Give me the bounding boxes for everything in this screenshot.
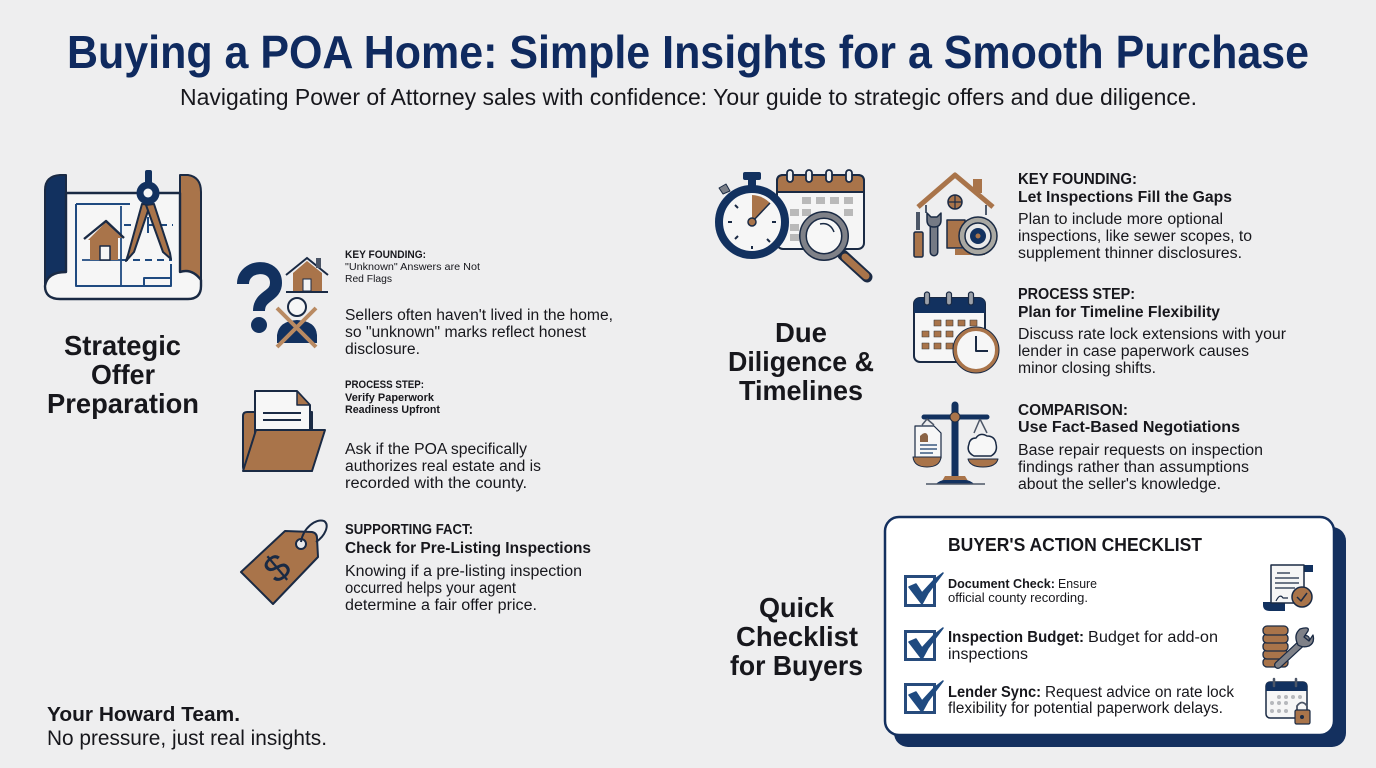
text: key founding unknown answers: disclosure. <box>345 341 420 358</box>
text: plan for timeline flexibility: Plan for Timeline Flexibility <box>1018 304 1220 321</box>
item: lender sync <box>948 684 1234 717</box>
text: plan for timeline flexibility <box>1018 286 1286 377</box>
icon: coins and wrench <box>1263 626 1314 667</box>
text: check for pre-listing inspections <box>345 522 591 614</box>
text: let inspections fill the gaps: KEY FOUNDING: <box>1018 171 1137 188</box>
heading: strategic offer preparation <box>47 330 199 419</box>
card <box>885 517 1334 735</box>
text: use fact-based negotiations <box>1018 402 1263 493</box>
heading: strategic offer preparation: Strategic <box>64 330 181 361</box>
text: use fact-based negotiations: about the seller's knowledge. <box>1018 476 1221 493</box>
item: document check: official county recording. <box>948 591 1088 605</box>
heading: quick checklist for buyers: Quick <box>759 592 834 623</box>
icon: blueprint with compass <box>45 170 201 299</box>
text: check for pre-listing inspections: Knowing if a pre-listing inspection <box>345 563 582 580</box>
text: let inspections fill the gaps: Let Inspections Fill the Gaps <box>1018 189 1232 206</box>
heading: due diligence and timelines: Timelines <box>739 375 863 406</box>
heading: strategic offer preparation: Preparation <box>47 388 199 419</box>
subtitle: Navigating Power of Attorney sales with confidence: Your guide to strategic offers and due diligence. <box>180 84 1197 110</box>
text: plan for timeline flexibility: lender in case paperwork causes <box>1018 343 1249 360</box>
text: use fact-based negotiations: findings rather than assumptions <box>1018 459 1249 476</box>
card shadow <box>894 527 1346 747</box>
text: verify paperwork readiness <box>345 379 541 492</box>
heading: quick checklist for buyers: for Buyers <box>730 650 863 681</box>
check: inspection budget <box>906 628 943 660</box>
item: lender sync: flexibility for potential paperwork delays. <box>948 700 1223 717</box>
text: verify paperwork readiness: Ask if the POA specifically <box>345 441 527 458</box>
footer: No pressure, just real insights. <box>47 727 327 750</box>
text: check for pre-listing inspections: determine a fair offer price. <box>345 597 537 614</box>
check: document check <box>906 573 943 606</box>
text: key founding unknown answers: Red Flags <box>345 273 392 285</box>
item: inspection budget: Budget for add-on <box>1088 629 1218 646</box>
text: check for pre-listing inspections: Check for Pre-Listing Inspections <box>345 540 591 557</box>
text: let inspections fill the gaps: supplement thinner disclosures. <box>1018 245 1242 262</box>
text: let inspections fill the gaps: inspections, like sewer scopes, to <box>1018 228 1252 245</box>
item: inspection budget <box>948 629 1218 663</box>
footer <box>47 703 327 750</box>
item: lender sync: Lender Sync: <box>948 684 1041 701</box>
heading: due diligence and timelines: Due <box>775 317 827 348</box>
text: verify paperwork readiness: PROCESS STEP: <box>345 379 424 391</box>
heading: strategic offer preparation: Offer <box>91 359 155 390</box>
text: verify paperwork readiness: recorded with the county. <box>345 475 527 492</box>
heading: due diligence and timelines: Diligence & <box>728 346 874 377</box>
item: document check: Ensure <box>1058 577 1097 591</box>
text: verify paperwork readiness: authorizes real estate and is <box>345 458 541 475</box>
icon: price tag: $ <box>256 546 299 592</box>
text: plan for timeline flexibility: PROCESS STEP: <box>1018 286 1135 303</box>
icon: calendar with padlock <box>1266 679 1310 724</box>
text: use fact-based negotiations: COMPARISON: <box>1018 402 1128 419</box>
text: check for pre-listing inspections: SUPPORTING FACT: <box>345 522 473 538</box>
item: document check: Document Check: <box>948 577 1055 591</box>
text: check for pre-listing inspections: occurred helps your agent <box>345 580 517 597</box>
text: key founding unknown answers <box>345 249 613 358</box>
icon: stopwatch, calendar and magnifier <box>719 170 867 277</box>
icon: price tag <box>241 520 327 604</box>
heading: quick checklist for buyers <box>730 592 863 681</box>
icon: calendar with clock <box>914 292 999 373</box>
icon: balance scale <box>913 405 998 484</box>
text: verify paperwork readiness: Verify Paperwork <box>345 392 435 404</box>
text: key founding unknown answers: "Unknown" Answers are Not <box>345 261 480 273</box>
icon: house with tools and sewer camera <box>914 175 997 257</box>
check: lender sync <box>906 681 943 712</box>
text: plan for timeline flexibility: minor closing shifts. <box>1018 360 1156 377</box>
heading: quick checklist for buyers: Checklist <box>736 621 858 652</box>
text: key founding unknown answers: Sellers often haven't lived in the home, <box>345 307 613 324</box>
item: document check <box>948 577 1097 605</box>
text: key founding unknown answers: so "unknown" marks reflect honest <box>345 324 587 341</box>
text: key founding unknown answers: KEY FOUNDING: <box>345 249 426 261</box>
item: inspection budget: Inspection Budget: <box>948 629 1084 646</box>
icon: certificate scroll <box>1263 565 1313 611</box>
footer: Your Howard Team. <box>47 703 240 726</box>
icon: question mark, house and crossed person <box>243 258 328 347</box>
title: Buying a POA Home: Simple Insights for a Smooth Purchase <box>67 26 1309 78</box>
item: lender sync: Request advice on rate lock <box>1045 684 1234 701</box>
text: plan for timeline flexibility: Discuss rate lock extensions with your <box>1018 326 1286 343</box>
text: use fact-based negotiations: Use Fact-Based Negotiations <box>1018 419 1240 436</box>
item: inspection budget: inspections <box>948 646 1028 663</box>
text: use fact-based negotiations: Base repair requests on inspection <box>1018 442 1263 459</box>
text: verify paperwork readiness: Readiness Upfront <box>345 404 440 416</box>
checklist heading: BUYER'S ACTION CHECKLIST <box>948 534 1203 555</box>
text: let inspections fill the gaps <box>1018 171 1252 262</box>
text: let inspections fill the gaps: Plan to include more optional <box>1018 211 1223 228</box>
panel: buyer's action checklist <box>885 517 1346 747</box>
icon: folder with document <box>243 391 325 471</box>
heading: due diligence and timelines <box>728 317 874 406</box>
